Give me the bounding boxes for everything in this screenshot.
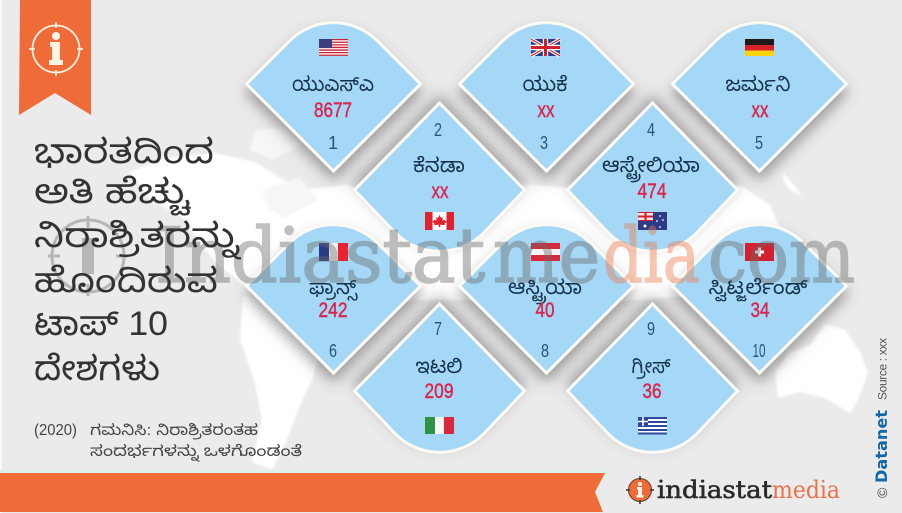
card labels over watermark: 6 bbox=[329, 341, 337, 361]
country name: ಗ್ರೀಸ್ bbox=[632, 356, 671, 379]
logo: indiastatmedia: indiastat bbox=[657, 476, 772, 504]
panel: card 2 Canada bbox=[354, 103, 524, 251]
value: 8677 bbox=[314, 99, 352, 122]
credit: Datanet and source bbox=[872, 338, 891, 498]
logo: indiastatmedia bbox=[626, 476, 840, 504]
value: 36 bbox=[642, 380, 662, 403]
flag: Germany bbox=[745, 39, 774, 56]
flag: Canada bbox=[425, 212, 454, 230]
panel: card 7 Italy bbox=[354, 304, 524, 452]
title: ಭಾರತದಿಂದ bbox=[34, 133, 214, 171]
rank: 5 bbox=[755, 133, 763, 153]
value: 474 bbox=[638, 180, 667, 203]
flag: UK bbox=[531, 39, 560, 56]
credit: Datanet and source: Datanet bbox=[872, 410, 891, 483]
flag: USA bbox=[319, 39, 348, 56]
watermark: Indiastat bbox=[155, 211, 485, 300]
country name: ಯುಕೆ bbox=[522, 74, 568, 96]
card labels over watermark: 242 bbox=[318, 299, 348, 322]
year: (2020) bbox=[34, 422, 77, 439]
value: 209 bbox=[424, 380, 454, 403]
card labels over watermark: 10 bbox=[752, 341, 766, 361]
value: xx bbox=[538, 99, 555, 122]
panel: card 4 Australia bbox=[568, 103, 738, 251]
flag: Austria bbox=[531, 243, 560, 261]
flag: Italy bbox=[425, 417, 454, 434]
note bbox=[90, 422, 302, 462]
rank: 7 bbox=[434, 319, 442, 339]
watermark bbox=[48, 211, 855, 300]
title: ನಿರಾಶ್ರಿತರನ್ನು bbox=[34, 217, 242, 260]
watermark: me bbox=[493, 211, 600, 300]
card labels over watermark: 40 bbox=[536, 299, 554, 322]
ribbon with info icon bbox=[19, 0, 91, 115]
rank: 9 bbox=[647, 319, 655, 339]
note: ಗಮನಿಸಿ: ನಿರಾಶ್ರಿತರಂತಹ bbox=[90, 422, 258, 440]
flag: Greece bbox=[638, 417, 667, 434]
flag: Australia bbox=[638, 212, 667, 230]
rank: 3 bbox=[540, 133, 548, 153]
country name: ಯುಎಸ್ಎ bbox=[292, 74, 374, 96]
watermark: com bbox=[708, 211, 855, 300]
title bbox=[34, 133, 242, 388]
title: ದೇಶಗಳು bbox=[34, 350, 160, 388]
flag: France bbox=[319, 243, 348, 261]
panel: card 8 Austria bbox=[460, 225, 634, 373]
panel: card 10 Switzerland bbox=[672, 225, 846, 373]
flag: Switzerland bbox=[745, 243, 774, 261]
rank: 1 bbox=[328, 133, 338, 153]
panel: card 6 France bbox=[246, 225, 420, 373]
bottom banner bbox=[0, 470, 606, 512]
rank: 4 bbox=[647, 120, 655, 140]
panel: card 1 USA bbox=[246, 23, 420, 171]
rank: 2 bbox=[434, 120, 442, 140]
title: ಅತಿ ಹೆಚ್ಚು bbox=[34, 173, 192, 216]
card labels over watermark: ಸ್ವಿಟ್ಜರ್ಲೆಂಡ್ bbox=[708, 277, 808, 302]
value: xx bbox=[752, 99, 769, 122]
card labels over watermark: ಫ್ರಾನ್ಸ್ bbox=[309, 277, 359, 301]
panel: card 9 Greece bbox=[568, 304, 738, 452]
note: ಸಂದರ್ಭಗಳನ್ನು ಒಳಗೊಂಡಂತೆ bbox=[90, 443, 302, 462]
credit: Datanet and source: Source : xxx bbox=[876, 338, 890, 400]
panel: card 3 UK bbox=[460, 23, 634, 171]
country name: ಆಸ್ಟ್ರೇಲಿಯಾ bbox=[602, 155, 700, 183]
title: ಟಾಪ್ 10 bbox=[34, 305, 168, 343]
card labels over watermark bbox=[309, 277, 808, 361]
country name: ಜರ್ಮನಿ bbox=[726, 74, 790, 96]
value: xx bbox=[432, 180, 449, 203]
country name: ಕೆನಡಾ bbox=[413, 155, 465, 177]
watermark: dia bbox=[603, 211, 700, 300]
logo: indiastatmedia: media bbox=[772, 476, 840, 504]
country name: ಇಟಲಿ bbox=[416, 356, 463, 378]
card labels over watermark: 34 bbox=[750, 299, 770, 322]
card labels over watermark: 8 bbox=[541, 341, 549, 361]
panel: card 5 Germany bbox=[672, 23, 846, 171]
world map bbox=[130, 153, 868, 470]
icon: info target bbox=[29, 22, 83, 76]
credit: Datanet and source: © bbox=[874, 487, 890, 498]
title: ಹೊಂದಿರುವ bbox=[34, 262, 218, 300]
card labels over watermark: ಆಸ್ಟ್ರಿಯಾ bbox=[508, 277, 582, 305]
